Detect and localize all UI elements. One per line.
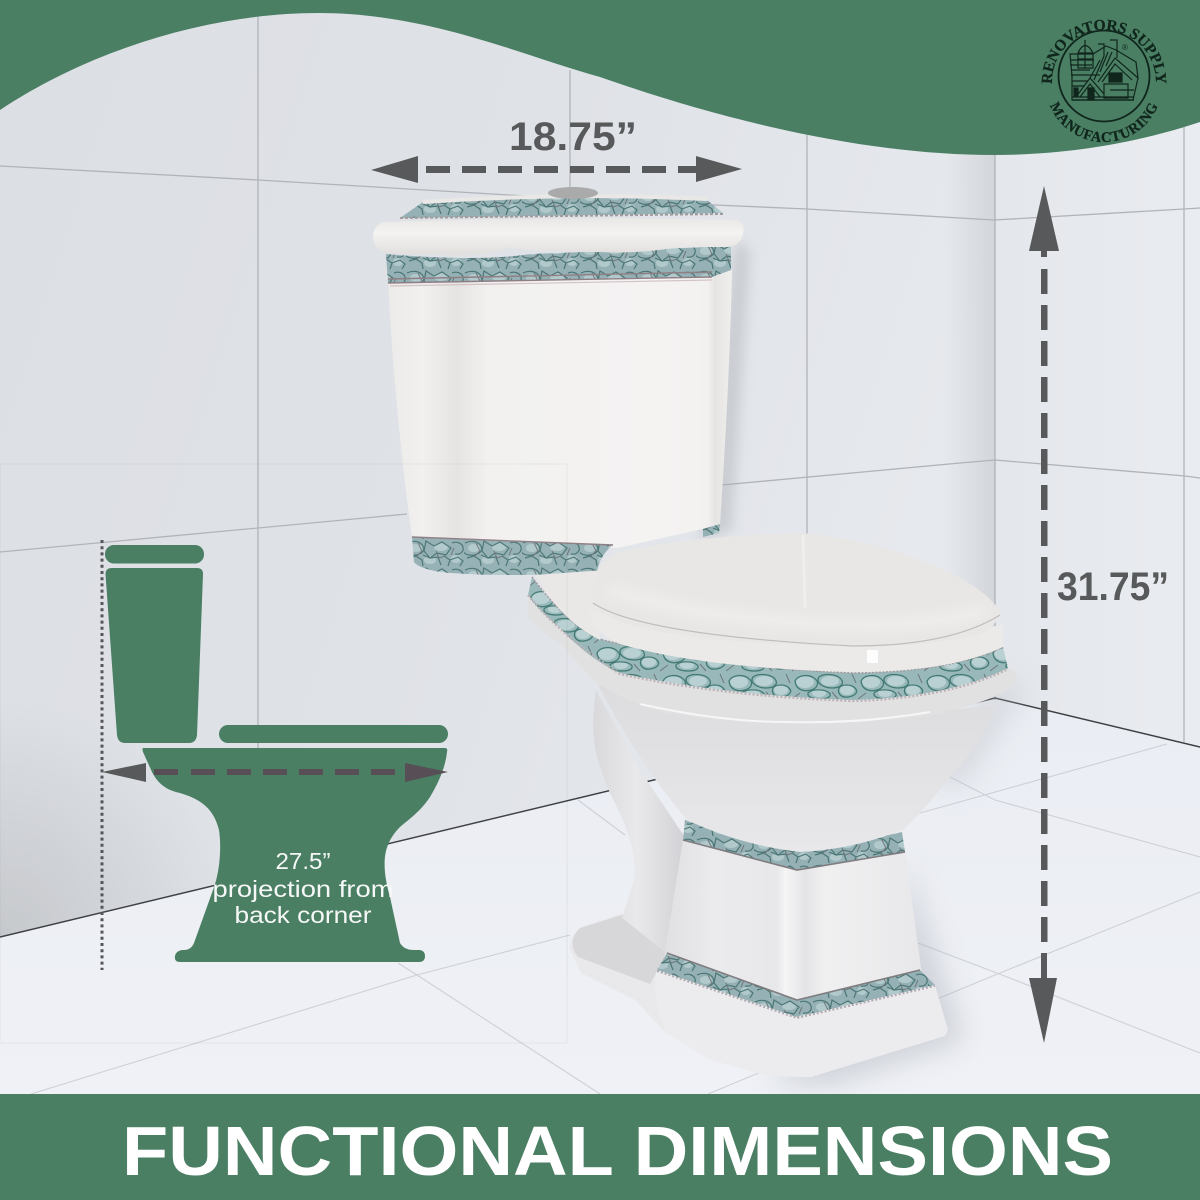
logo: Renovators Supply Manufacturing — [1042, 20, 1166, 142]
logo text top: RENOVATORS SUPPLY — [1042, 20, 1166, 84]
back trapway — [593, 690, 690, 955]
silhouette toilet — [105, 545, 448, 962]
registered mark: ® — [1122, 43, 1128, 52]
projection arrow — [102, 763, 448, 782]
dotted back wall line — [100, 540, 104, 970]
footer band — [0, 1094, 1200, 1200]
projection label: back corner — [234, 902, 372, 928]
toilet photo — [373, 187, 1025, 1085]
base plate top face — [572, 915, 670, 984]
faint overlay rectangle from product composite — [0, 464, 567, 1043]
height arrow — [1029, 186, 1059, 1043]
projection label: projection from — [212, 876, 394, 902]
header: green wave — [0, 0, 1200, 155]
base plate — [570, 913, 800, 1075]
logo house drawing — [1070, 40, 1138, 100]
projection label: 27.5” — [276, 848, 330, 874]
background: bathroom walls — [0, 0, 1200, 950]
width arrow — [371, 156, 742, 183]
tank — [373, 187, 744, 575]
bowl — [528, 570, 1017, 852]
background: wall tile grout lines — [0, 10, 1200, 937]
toilet seat and lid — [590, 533, 1003, 672]
dimension: 31.75 inch height — [1029, 186, 1169, 1043]
footer title: FUNCTIONAL DIMENSIONS — [122, 1112, 1113, 1190]
height value: 31.75” — [1057, 565, 1169, 609]
background: tiled floor — [0, 698, 1200, 1094]
projection label — [212, 848, 394, 928]
side view diagram: 27.5 inch projection — [102, 540, 448, 970]
shadows behind toilet — [700, 240, 1025, 1085]
pedestal — [655, 820, 948, 1077]
logo text bottom: MANUFACTURING — [1050, 101, 1158, 142]
width value: 18.75” — [509, 115, 637, 159]
dimension: 18.75 inch width — [371, 115, 742, 183]
